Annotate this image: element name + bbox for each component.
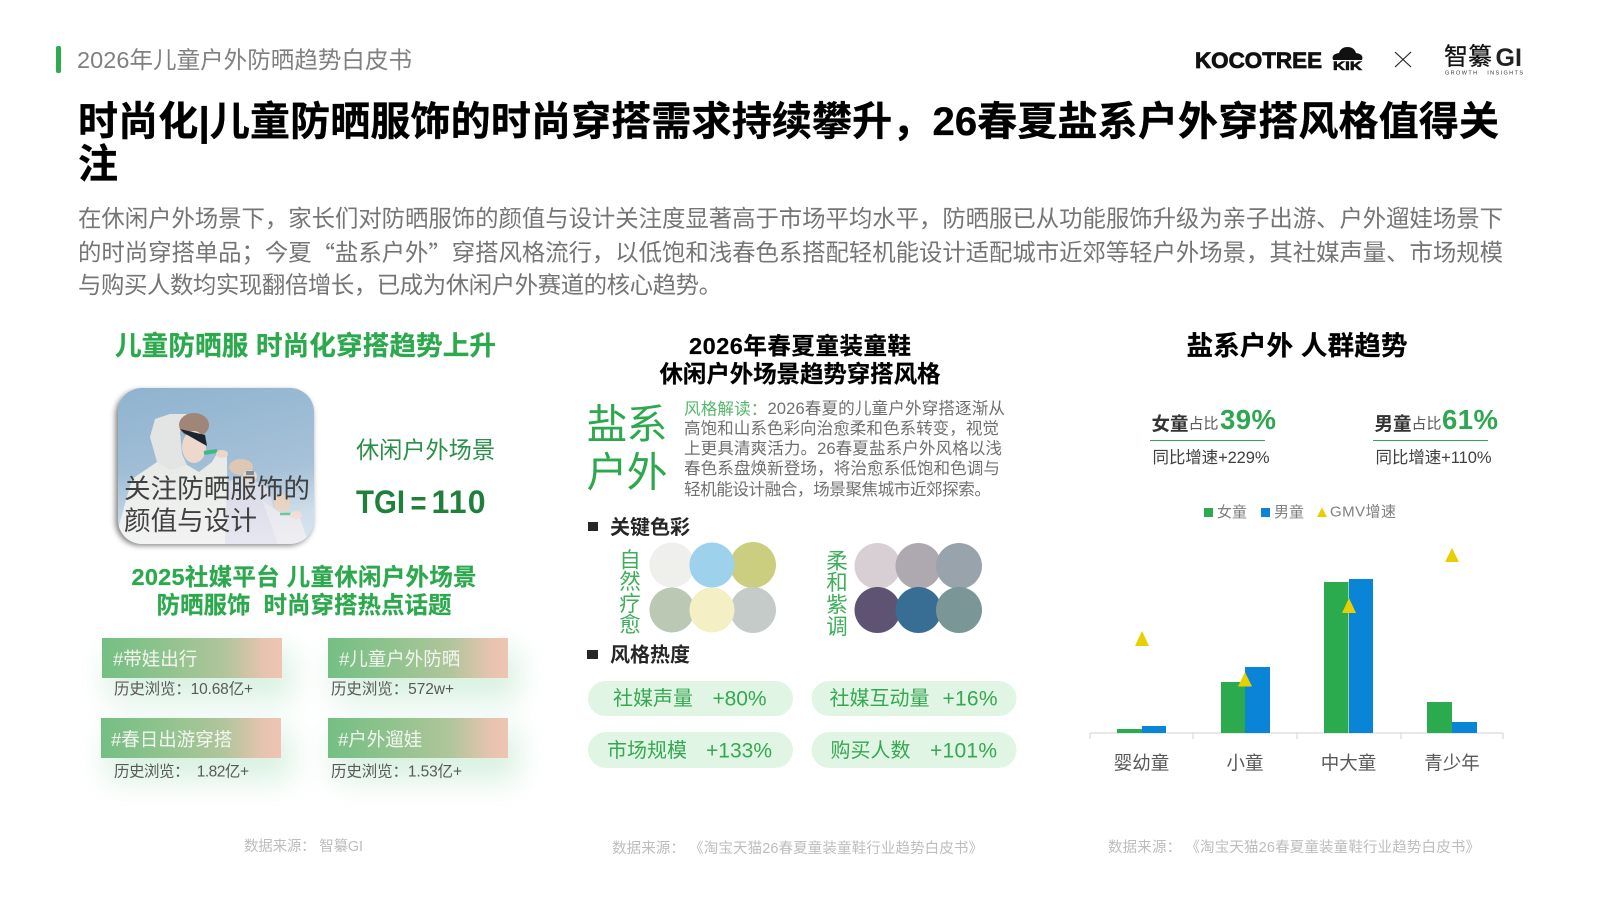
topic: 带娃出行: 历史浏览：10.68亿+	[114, 680, 253, 698]
colour group: 自然疗愈: 自	[619, 548, 641, 572]
topic: 户外遛娃: 历史浏览：1.53亿+	[331, 762, 462, 780]
intro paragraph	[78, 206, 1503, 298]
icon: cloud tree: KIK	[1333, 61, 1363, 73]
colour group: 柔和紫调: 和	[826, 571, 848, 595]
stat: girls	[1150, 404, 1276, 467]
metric: 市场规模: +133%	[706, 740, 772, 762]
heading: right panel: 盐系户外 人群趋势	[1186, 331, 1408, 361]
heading: left panel: 儿童防晒服 时尚化穿搭趋势上升	[115, 331, 496, 361]
topic: 带娃出行	[102, 638, 282, 698]
metric: 社媒互动量: 社媒互动量	[830, 687, 930, 710]
stat: boys: 61%	[1442, 404, 1498, 435]
stat: boys: 同比增速+110%	[1376, 448, 1492, 467]
intro paragraph: 与购买人数均实现翻倍增长，已成为休闲户外赛道的核心趋势。	[78, 272, 722, 298]
bar chart	[1090, 548, 1503, 774]
photo: children in sun-protective hoodies: 颜值与设计	[124, 506, 257, 536]
stat: boys	[1373, 404, 1498, 467]
metric: 社媒声量: 社媒声量	[613, 687, 693, 710]
GMV growth markers	[1135, 548, 1459, 686]
heading: middle panel: 休闲户外场景趋势穿搭风格	[660, 361, 941, 387]
stat: girls: 女童	[1152, 414, 1189, 434]
metric: 市场规模: 市场规模	[607, 739, 687, 762]
style description: 轻机能设计融合，场景聚焦城市近郊探索。	[684, 480, 991, 499]
heading: social topics	[132, 563, 476, 618]
style name	[586, 402, 668, 496]
category labels: 青少年	[1424, 752, 1480, 774]
chart legend: GMV增速	[1330, 504, 1396, 520]
metric: 社媒声量	[588, 681, 793, 716]
chart legend: 女童	[1217, 503, 1247, 521]
bars: 青少年	[1427, 702, 1477, 733]
title	[78, 100, 1499, 186]
logo: 智纂GI: GROWTH INSIGHTS	[1445, 70, 1523, 76]
topic: 儿童户外防晒: #儿童户外防晒	[339, 648, 460, 670]
colour group: 柔和紫调: 柔	[826, 550, 848, 574]
panel: right audience trend	[1090, 331, 1503, 856]
style name: 户外	[586, 450, 668, 496]
topic: 户外遛娃: #户外遛娃	[338, 729, 422, 750]
style description: 上更具清爽活力。26春夏盐系户外风格以浅	[684, 439, 1002, 458]
topic: 带娃出行: #带娃出行	[113, 648, 197, 670]
heading: middle panel	[660, 332, 941, 387]
TGI callout: 110	[432, 484, 486, 520]
photo: children in sun-protective hoodies	[116, 388, 314, 546]
category labels: 小童	[1226, 752, 1264, 774]
style description	[684, 399, 1005, 499]
metric: 购买人数	[812, 732, 1016, 768]
chart legend	[1204, 503, 1396, 521]
source: right: 数据来源： 《淘宝天猫26春夏童装童鞋行业趋势白皮书》	[1108, 838, 1480, 856]
metric: 购买人数: +101%	[930, 740, 997, 762]
intro paragraph: 的时尚穿搭单品；今夏“盐系户外”穿搭风格流行，以低饱和浅春色系搭配轻机能设计适配城市近郊等轻户外场景，其社媒声量、市场规模	[78, 236, 1503, 270]
bars: 婴幼童	[1117, 726, 1166, 733]
section heading: style heat: 风格热度	[610, 644, 690, 666]
header bar and report name: 2026年儿童户外防晒趋势白皮书	[77, 47, 412, 73]
topic: 春日出游穿搭	[101, 718, 281, 780]
heading: middle panel: 2026年春夏童装童鞋	[689, 332, 911, 359]
colour group: 柔和紫调	[826, 543, 982, 639]
style description: 春色系盘焕新登场，将治愈系低饱和色调与	[684, 459, 1000, 478]
heading: social topics: 防晒服饰 时尚穿搭热点话题	[156, 592, 452, 618]
metric: 社媒互动量: +16%	[942, 688, 998, 710]
stat: boys: 占比	[1412, 416, 1442, 432]
TGI callout: =	[410, 485, 426, 521]
category labels: 中大童	[1321, 752, 1376, 774]
colour group: 柔和紫调: 紫	[826, 593, 848, 617]
colour group: 自然疗愈	[619, 542, 776, 637]
category labels	[1114, 752, 1480, 774]
style name: 盐系	[586, 402, 668, 448]
topic: 儿童户外防晒	[328, 638, 508, 698]
colour group: 自然疗愈: 然	[619, 570, 641, 594]
chart legend: 男童	[1274, 503, 1304, 521]
topic: 户外遛娃	[328, 718, 508, 780]
photo: children in sun-protective hoodies: 关注防晒服饰的	[124, 474, 310, 504]
icon: cloud tree	[1333, 47, 1363, 73]
heading: social topics: 2025社媒平台 儿童休闲户外场景	[132, 563, 476, 590]
TGI callout	[356, 437, 495, 521]
topic: 儿童户外防晒: 历史浏览：572w+	[331, 680, 454, 698]
logo: 智纂GI: I	[1515, 44, 1522, 72]
style description: 高饱和山系色彩向治愈柔和色系转变，视觉	[684, 419, 999, 438]
topic: 春日出游穿搭: 历史浏览： 1.82亿+	[114, 762, 249, 780]
style description: 风格解读：2026春夏的儿童户外穿搭逐渐从	[684, 399, 1005, 418]
metric: 社媒互动量	[812, 681, 1016, 716]
stat: girls: 同比增速+229%	[1152, 448, 1270, 467]
stat: boys: 男童	[1374, 414, 1412, 434]
TGI callout: TGI	[356, 484, 405, 520]
colour group: 自然疗愈: 愈	[619, 613, 641, 637]
bars: 小童	[1221, 667, 1270, 733]
topic: 春日出游穿搭: #春日出游穿搭	[111, 729, 232, 750]
logo: KOCOTREE: KOCOTREE	[1195, 48, 1322, 73]
stat: girls: 39%	[1220, 404, 1276, 435]
source: left: 数据来源： 智纂GI	[244, 837, 363, 855]
logo: 智纂GI: G	[1496, 44, 1515, 72]
logo: 智纂GI: 智纂	[1444, 44, 1492, 70]
title: 时尚化|儿童防晒服饰的时尚穿搭需求持续攀升，26春夏盐系户外穿搭风格值得关	[78, 100, 1499, 144]
colour group: 自然疗愈: 疗	[619, 592, 641, 616]
panel: left fashion trend	[101, 331, 518, 855]
source: middle: 数据来源： 《淘宝天猫26春夏童装童鞋行业趋势白皮书》	[612, 839, 983, 857]
TGI callout: 休闲户外场景	[356, 437, 495, 463]
logo: 智纂GI	[1444, 44, 1523, 76]
stat: girls: 占比	[1188, 416, 1219, 432]
logos	[1195, 44, 1523, 76]
category labels: 婴幼童	[1114, 752, 1169, 774]
bars: 中大童	[1324, 579, 1373, 733]
panel: middle style trend	[586, 332, 1016, 857]
metric: 购买人数: 购买人数	[830, 739, 910, 762]
section heading: key colours: 关键色彩	[610, 516, 690, 539]
colour group: 柔和紫调: 调	[826, 615, 848, 639]
icon: times separator	[1395, 52, 1411, 67]
metric: 社媒声量: +80%	[712, 688, 766, 710]
metric: 市场规模	[588, 732, 793, 768]
intro paragraph: 在休闲户外场景下，家长们对防晒服饰的颜值与设计关注度显著高于市场平均水平，防晒服已从功能服饰升级为亲子出游、户外遛娃场景下	[78, 206, 1503, 232]
title: 注	[78, 142, 118, 186]
